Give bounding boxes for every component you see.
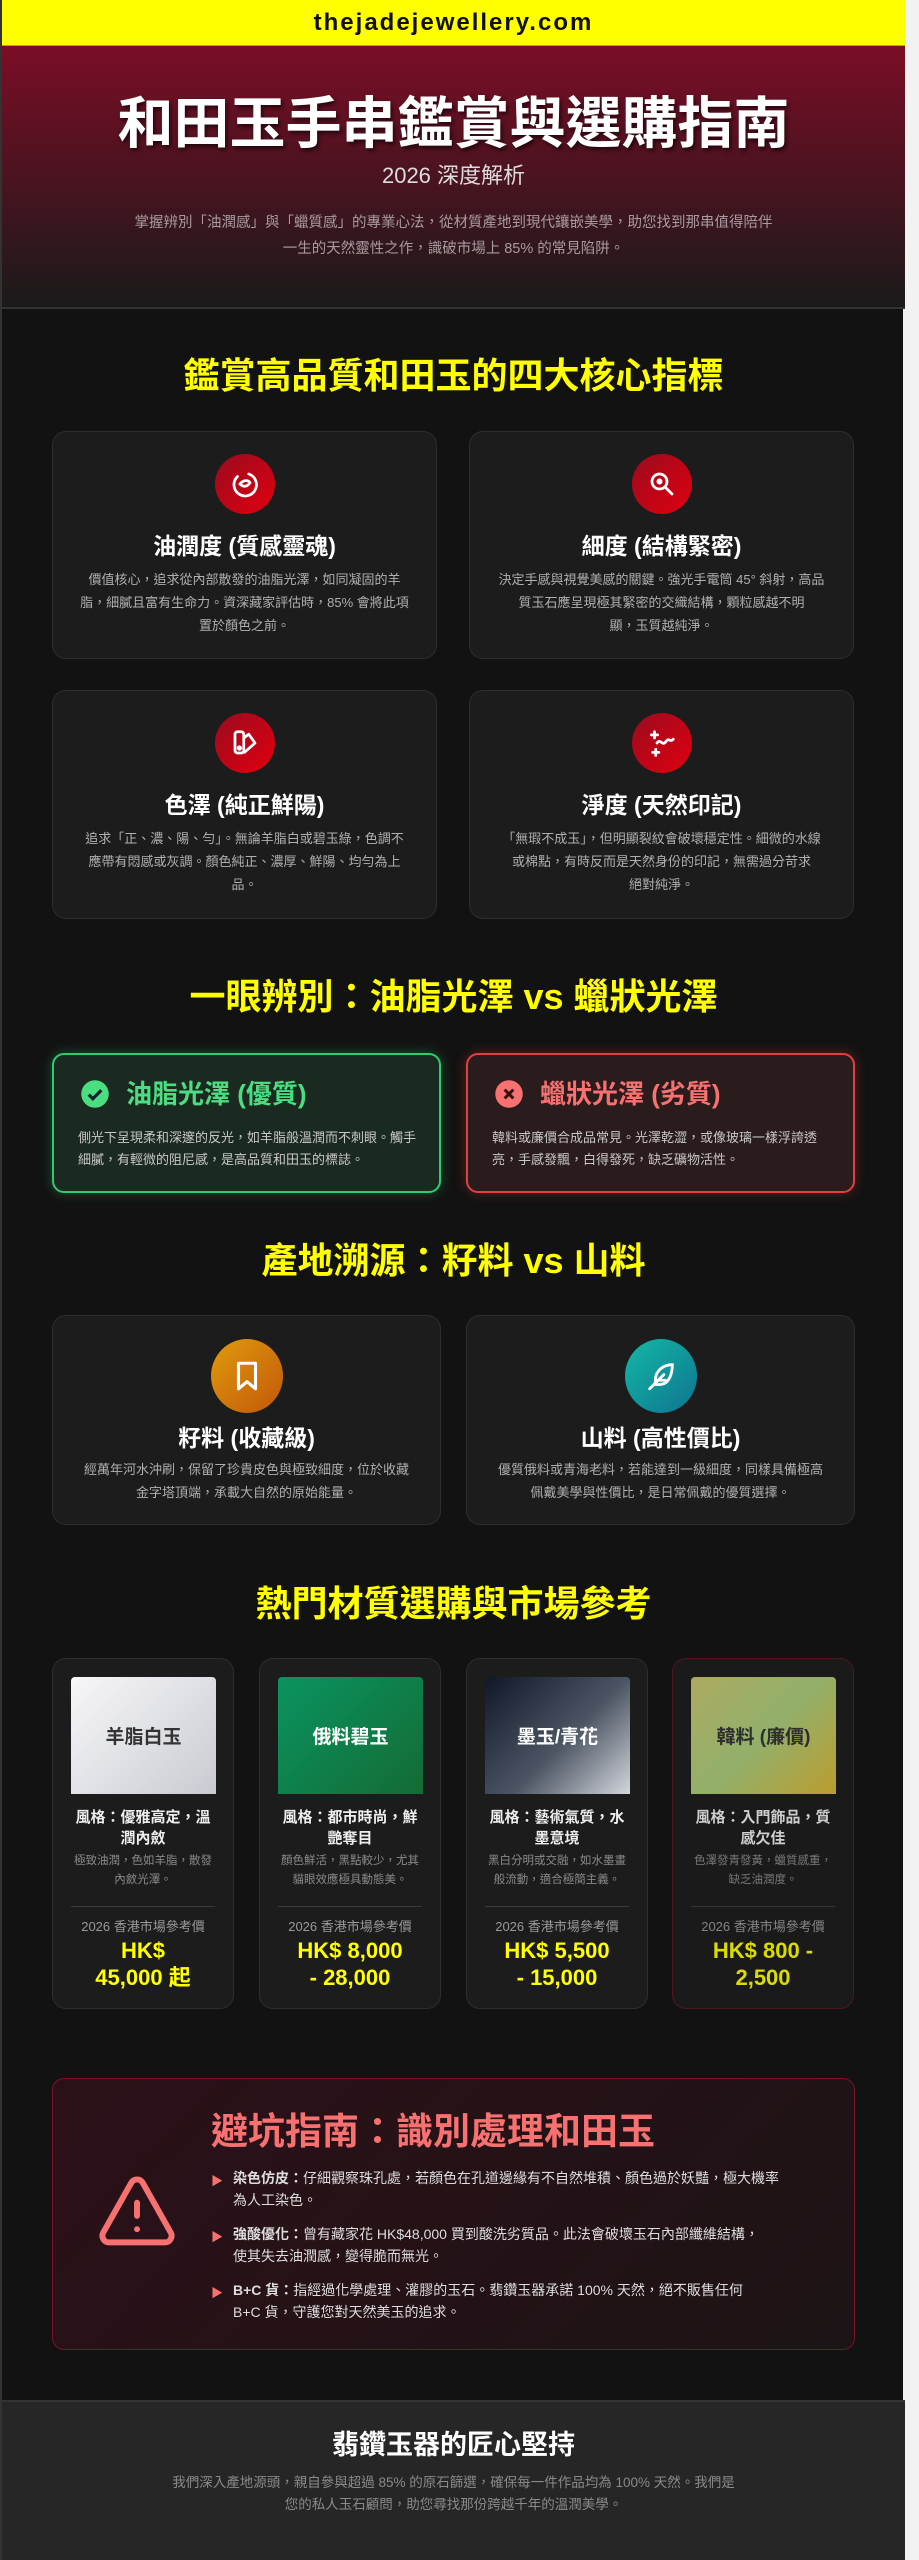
desc: 缺乏油潤度。 xyxy=(728,1874,798,1886)
style xyxy=(282,1809,418,1847)
description: 「無瑕不成玉」，但明顯裂紋會破壞穩定性。細微的水線或棉點，有時反而是天然身份的印記，無需過分苛求 xyxy=(502,831,821,869)
text: 韓料或廉價合成品常見。光澤乾澀，或像玻璃一樣浮誇透亮，手感發飄，白得發死，缺乏礦物活性。 xyxy=(492,1130,817,1167)
style: 風格：入門飾品，質 xyxy=(695,1809,830,1826)
icon: sparkle xyxy=(632,713,692,773)
intro paragraph: 掌握辨別「油潤感」與「蠟質感」的專業心法，從材質產地到現代鑲嵌美學，助您找到那串值得陪伴 xyxy=(134,215,772,231)
desc xyxy=(488,1854,626,1886)
main title: 和田玉手串鑑賞與選購指南 xyxy=(118,92,790,155)
bullet list: ▶ xyxy=(211,2174,223,2188)
card: ink jade: HK$ 5,500 xyxy=(504,1938,610,1963)
card: fineness xyxy=(469,431,854,659)
bullet list: ▶ xyxy=(211,2230,223,2244)
heading with x icon: 蠟狀光澤 (劣質) xyxy=(540,1079,721,1109)
heading with check icon: 油脂光澤 (優質) xyxy=(126,1079,307,1109)
card: oiliness xyxy=(52,431,437,659)
panel: pitfall guide xyxy=(52,2078,855,2350)
title: 細度 (結構緊密) xyxy=(582,533,741,559)
description: 優質俄料或青海老料，若能達到一級細度，同樣具備極高佩戴美學與性價比，是日常佩戴的優質選擇。 xyxy=(498,1462,823,1500)
bullet list xyxy=(211,2170,779,2320)
bullet list: 為人工染色。 xyxy=(233,2192,317,2208)
card: clarity xyxy=(469,690,854,919)
section title: materials & market: 熱門材質選購與市場參考 xyxy=(255,1583,652,1624)
section title: origin: 產地溯源：籽料 vs 山料 xyxy=(261,1240,646,1281)
footer text xyxy=(172,2475,735,2512)
price: 2026 香港市場參考價 xyxy=(288,1919,412,1934)
desc: 般流動，適合極簡主義。 xyxy=(494,1874,620,1886)
bullet list: 染色仿皮：仔細觀察珠孔處，若顏色在孔道邊緣有不自然堆積、顏色過於妖豔，極大機率 xyxy=(233,2170,779,2186)
swatch xyxy=(485,1677,630,1794)
style: 風格：都市時尚，鮮 xyxy=(282,1809,418,1826)
text: 側光下呈現柔和深邃的反光，如羊脂般溫潤而不刺眼。觸手細膩，有輕微的阻尼感，是高品質和田玉的標誌。 xyxy=(78,1130,416,1167)
panel: oily luster (good) xyxy=(52,1053,441,1193)
card: ink jade xyxy=(466,1658,648,2009)
bullet list: 強酸優化：曾有藏家花 HK$48,000 買到酸洗劣質品。此法會破壞玉石內部纖維結構， xyxy=(233,2226,759,2242)
intro paragraph: 一生的天然靈性之作，識破市場上 85% 的常見陷阱。 xyxy=(283,241,624,257)
intro paragraph xyxy=(134,214,772,257)
card: mutton fat white jade xyxy=(52,1658,234,2009)
title: 色澤 (純正鮮陽) xyxy=(165,792,324,818)
icon: drop xyxy=(215,454,275,514)
price: 2026 香港市場參考價 xyxy=(701,1919,825,1934)
swatch xyxy=(278,1677,423,1794)
swatch: 俄料碧玉 xyxy=(312,1727,388,1748)
price: 2026 香港市場參考價 xyxy=(495,1919,619,1934)
price: 2026 香港市場參考價 xyxy=(81,1919,205,1934)
hero header xyxy=(2,46,905,309)
footer text: 我們深入產地源頭，親自參與超過 85% 的原石篩選，確保每一件作品均為 100% 天然。我們是 xyxy=(172,2475,735,2490)
title: 山料 (高性價比) xyxy=(581,1425,740,1451)
section title: luster comparison: 一眼辨別：油脂光澤 vs 蠟狀光澤 xyxy=(189,976,718,1017)
description: 絕對純淨。 xyxy=(629,877,694,892)
swatch xyxy=(71,1677,216,1794)
top url bar xyxy=(2,0,905,46)
desc: 色澤發青發黃，蠟質感重， xyxy=(694,1855,832,1867)
style: 感欠佳 xyxy=(740,1830,786,1847)
desc: 顏色鮮活，黑點較少，尤其 xyxy=(281,1855,419,1867)
desc: 貓眼效應極具動態美。 xyxy=(292,1874,408,1886)
card: Russian green jade: HK$ 8,000 xyxy=(297,1938,403,1963)
style: 風格：藝術氣質，水 xyxy=(489,1809,624,1826)
title: 籽料 (收藏級) xyxy=(178,1425,315,1451)
panel: waxy luster (poor) xyxy=(466,1053,855,1193)
card: Russian green jade: - 28,000 xyxy=(310,1965,390,1990)
bullet list: B+C 貨，守護您對天然美玉的追求。 xyxy=(233,2304,461,2320)
card: Korean material xyxy=(672,1658,854,2009)
icon: palette xyxy=(215,713,275,773)
footer text: 您的私人玉石顧問，助您尋找那份跨越千年的溫潤美學。 xyxy=(285,2497,622,2512)
description: 顯，玉質越純淨。 xyxy=(609,618,714,633)
description xyxy=(499,572,824,633)
top url bar: thejadejewellery.com xyxy=(314,9,593,36)
card: seed material xyxy=(52,1315,441,1525)
card: Korean material: HK$ 800 - xyxy=(713,1938,813,1963)
description: 經萬年河水沖刷，保留了珍貴皮色與極致細度，位於收藏金字塔頂端，承載大自然的原始能量。 xyxy=(84,1462,409,1500)
swatch: 羊脂白玉 xyxy=(105,1727,182,1748)
description xyxy=(502,831,821,892)
icon: magnifier xyxy=(632,454,692,514)
section title: four indicators: 鑑賞高品質和田玉的四大核心指標 xyxy=(183,355,724,396)
swatch: 韓料 (廉價) xyxy=(717,1727,810,1748)
title: 淨度 (天然印記) xyxy=(582,792,741,818)
desc xyxy=(74,1854,212,1886)
style: 墨意境 xyxy=(534,1830,580,1847)
title: 避坑指南：識別處理和田玉 xyxy=(211,2111,655,2152)
style xyxy=(695,1809,830,1847)
bullet list: ▶ xyxy=(211,2286,223,2300)
desc xyxy=(281,1854,419,1886)
description: 追求「正、濃、陽、勻」。無論羊脂白或碧玉綠，色調不應帶有悶感或灰調。顏色純正、濃厚、鮮陽、均勻為上品。 xyxy=(85,831,404,892)
style: 風格：優雅高定，溫 xyxy=(75,1809,210,1826)
desc xyxy=(694,1854,832,1886)
bullet list: B+C 貨：指經過化學處理、灌膠的玉石。翡鑽玉器承諾 100% 天然，絕不販售任何 xyxy=(233,2282,743,2298)
footer xyxy=(2,2400,905,2560)
icon: feather xyxy=(625,1339,697,1413)
desc: 黑白分明或交融，如水墨畫 xyxy=(488,1855,626,1867)
footer title: 翡鑽玉器的匠心堅持 xyxy=(332,2430,575,2460)
swatch xyxy=(691,1677,836,1794)
card: mountain material xyxy=(466,1315,855,1525)
card: colour xyxy=(52,690,437,919)
card: mutton fat white jade: 45,000 起 xyxy=(95,1965,191,1990)
description: 價值核心，追求從內部散發的油脂光澤，如同凝固的羊脂，細膩且富有生命力。資深藏家評估時，85% 會將此項置於顏色之前。 xyxy=(80,572,409,633)
card: mutton fat white jade: HK$ xyxy=(121,1938,165,1963)
icon: bookmark xyxy=(211,1339,283,1413)
icon: warning xyxy=(99,2176,175,2246)
style: 艷奪目 xyxy=(327,1830,372,1847)
desc: 內斂光澤。 xyxy=(114,1874,172,1886)
description: 決定手感與視覺美感的關鍵。強光手電筒 45° 斜射，高品質玉石應呈現極其緊密的交織結構，顆粒感越不明 xyxy=(499,572,824,610)
desc: 極致油潤，色如羊脂，散發 xyxy=(74,1855,212,1867)
card: Korean material: 2,500 xyxy=(735,1965,791,1990)
style: 潤內斂 xyxy=(120,1830,166,1847)
card: Russian green jade xyxy=(259,1658,441,2009)
style xyxy=(489,1809,624,1847)
bullet list: 使其失去油潤感，變得脆而無光。 xyxy=(233,2248,443,2264)
style xyxy=(75,1809,210,1847)
title: 油潤度 (質感靈魂) xyxy=(153,533,336,559)
subtitle: 2026 深度解析 xyxy=(382,163,525,188)
swatch: 墨玉/青花 xyxy=(517,1727,598,1748)
card: ink jade: - 15,000 xyxy=(517,1965,597,1990)
